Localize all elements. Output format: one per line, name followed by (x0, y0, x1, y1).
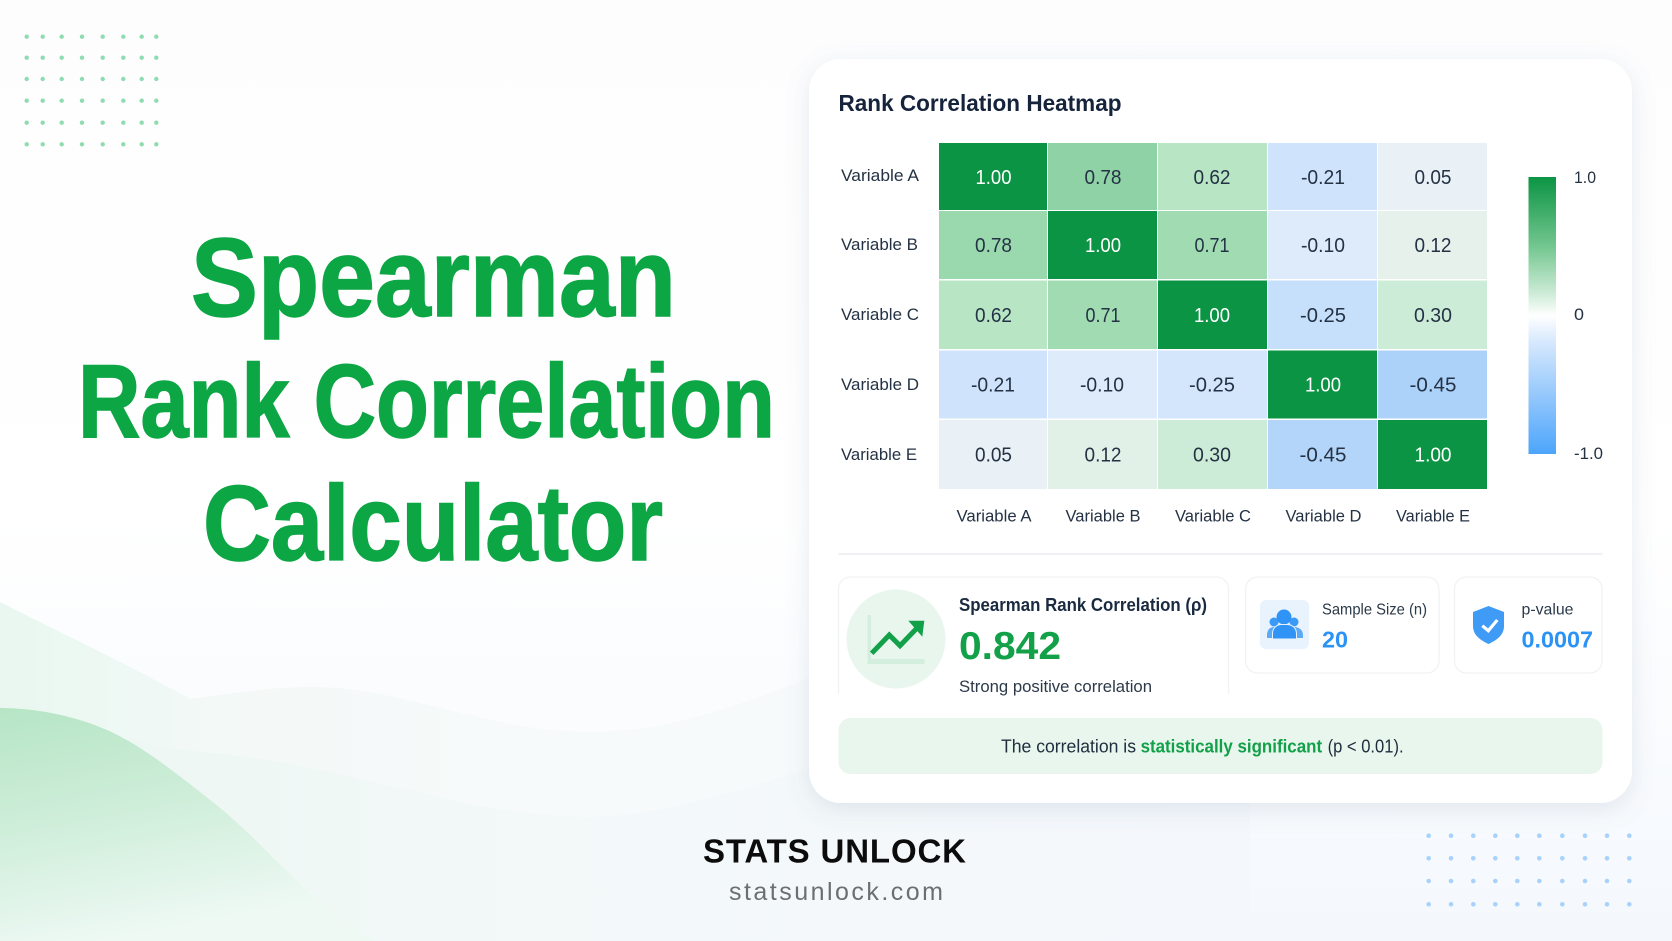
row: Variable B: 1.00 (1085, 235, 1121, 257)
row: Variable D: -0.21 (971, 374, 1015, 396)
stat card: sample size (1246, 577, 1439, 673)
stat card: p-value (1454, 577, 1602, 673)
value: 20: 20 (1322, 626, 1348, 652)
row: Variable D: Variable D (841, 375, 919, 394)
callout: significance banner: statistically significant (1141, 736, 1322, 756)
label: p-value: p-value (1522, 602, 1574, 618)
footer brand (703, 832, 966, 906)
label: sample size: Sample Size (n) (1322, 602, 1427, 618)
row: Variable B: -0.10 (1301, 235, 1345, 257)
colour scale legend (1528, 168, 1603, 463)
row: Variable C: 0.71 (1086, 305, 1120, 327)
callout: significance banner (838, 718, 1602, 774)
title (78, 216, 775, 583)
row: Variable E: 0.05 (975, 444, 1012, 466)
row: Variable A: 0.78 (1084, 167, 1122, 189)
stat caption: Strong positive correlation (959, 677, 1152, 696)
callout: significance banner: (p < 0.01). (1328, 736, 1404, 756)
row: Variable B: 0.71 (1194, 235, 1230, 257)
callout: significance banner: The correlation is (1001, 736, 1136, 756)
heatmap chart (841, 143, 1487, 526)
panel: heatmap card (809, 59, 1632, 803)
row: Variable C: 0.62 (975, 305, 1012, 327)
title: Calculator (203, 463, 663, 583)
column labels: Variable A (956, 506, 1032, 526)
row: Variable A: 0.05 (1414, 167, 1452, 189)
row: Variable A: 0.62 (1194, 167, 1230, 189)
row: Variable C: Variable C (841, 305, 919, 324)
colour scale legend: 0 (1574, 305, 1584, 324)
icon: people (1260, 600, 1309, 649)
heading: Rank Correlation Heatmap: Rank Correlation Heatmap (838, 90, 1122, 116)
row: Variable D: 1.00 (1305, 374, 1341, 396)
footer brand: statsunlock.com (729, 878, 943, 906)
row: Variable C: 1.00 (1194, 305, 1230, 327)
row: Variable D: -0.10 (1080, 374, 1124, 396)
row: Variable B: 0.78 (975, 235, 1012, 257)
row: Variable C (841, 280, 1487, 349)
row: Variable C: -0.25 (1300, 305, 1346, 327)
colour scale legend: -1.0 (1574, 444, 1603, 463)
title: Rank Correlation (78, 344, 775, 460)
decorative waves (0, 602, 1250, 941)
row: Variable E: 0.30 (1193, 444, 1231, 466)
column labels: Variable B (1066, 506, 1140, 526)
row: Variable D (841, 350, 1487, 418)
stat value: 0.842 (959, 625, 1061, 668)
row: Variable C: 0.30 (1414, 305, 1452, 327)
row: Variable E: Variable E (841, 445, 917, 464)
icon: shield check (1473, 606, 1504, 644)
row: Variable E (841, 420, 1487, 489)
row: Variable E: 0.12 (1084, 444, 1122, 466)
footer brand: STATS UNLOCK (703, 832, 966, 870)
stat card: Spearman correlation (838, 577, 1228, 696)
row: Variable A: -0.21 (1301, 167, 1345, 189)
row: Variable B: 0.12 (1414, 235, 1452, 257)
row: Variable B: Variable B (841, 235, 918, 254)
row: Variable A: 1.00 (976, 167, 1012, 189)
column labels: Variable C (1175, 506, 1251, 526)
row: Variable A: Variable A (841, 166, 920, 185)
value: 0.0007: 0.0007 (1522, 626, 1593, 652)
icon: rising trend chart (846, 590, 946, 688)
stat label: Spearman Rank Correlation (ρ) (959, 595, 1207, 615)
column labels: Variable E (1396, 506, 1470, 526)
row: Variable D: -0.45 (1410, 374, 1456, 396)
colour scale legend: 1.0 (1574, 168, 1596, 187)
column labels (956, 506, 1470, 526)
row: Variable E: -0.45 (1300, 444, 1346, 466)
row: Variable A (841, 143, 1487, 210)
title: Spearman (191, 216, 676, 340)
column labels: Variable D (1286, 506, 1362, 526)
row: Variable D: -0.25 (1189, 374, 1235, 396)
dot grid: top left (24, 34, 158, 146)
dot grid: bottom right (1426, 833, 1632, 907)
row: Variable E: 1.00 (1414, 444, 1452, 466)
row: Variable B (841, 211, 1487, 279)
